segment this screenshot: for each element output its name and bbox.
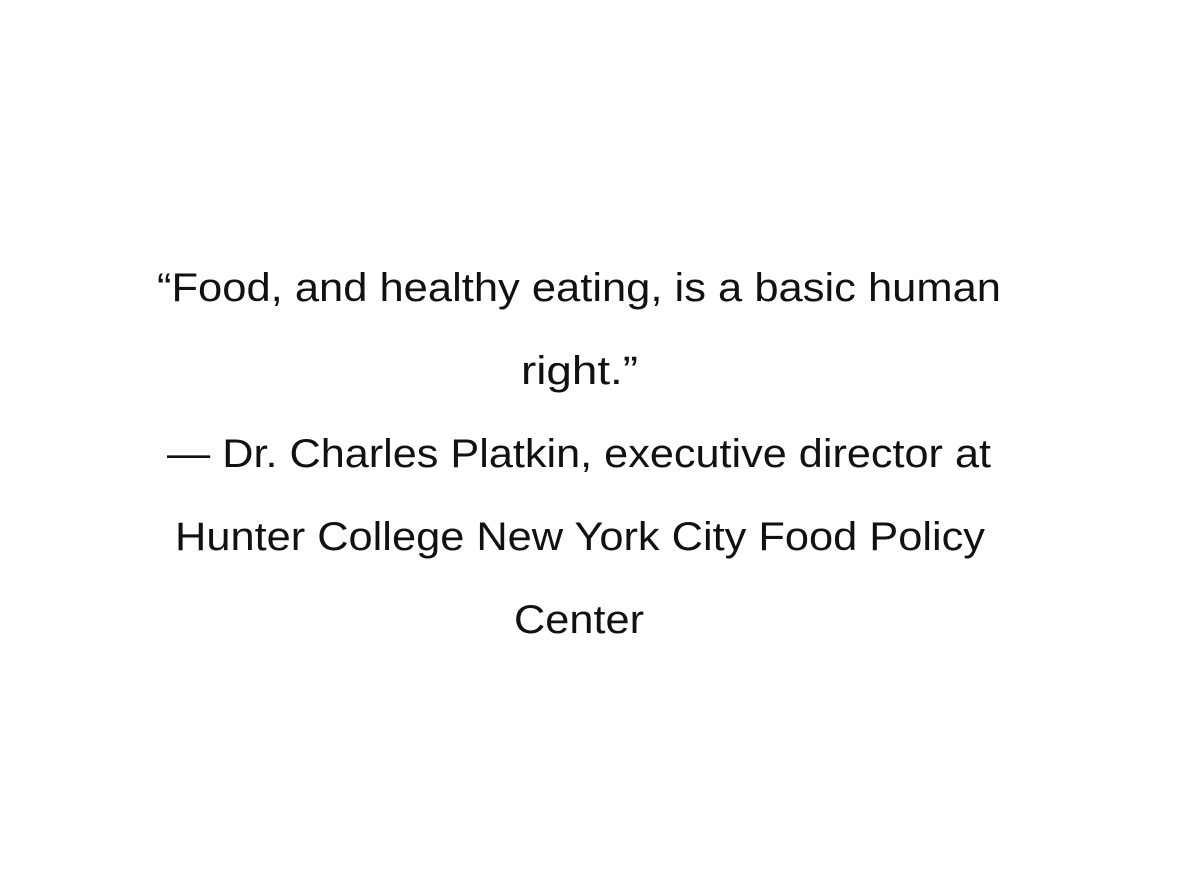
attribution text: Hunter College New York City Food Policy <box>175 515 985 559</box>
attribution text: — Dr. Charles Platkin, executive director at <box>167 432 991 476</box>
quotation text: right.” <box>521 349 638 393</box>
quotation text: “Food, and healthy eating, is a basic human <box>157 266 1001 310</box>
quotation text <box>157 266 1001 393</box>
attribution text: Center <box>514 598 644 642</box>
attribution text <box>167 432 991 642</box>
